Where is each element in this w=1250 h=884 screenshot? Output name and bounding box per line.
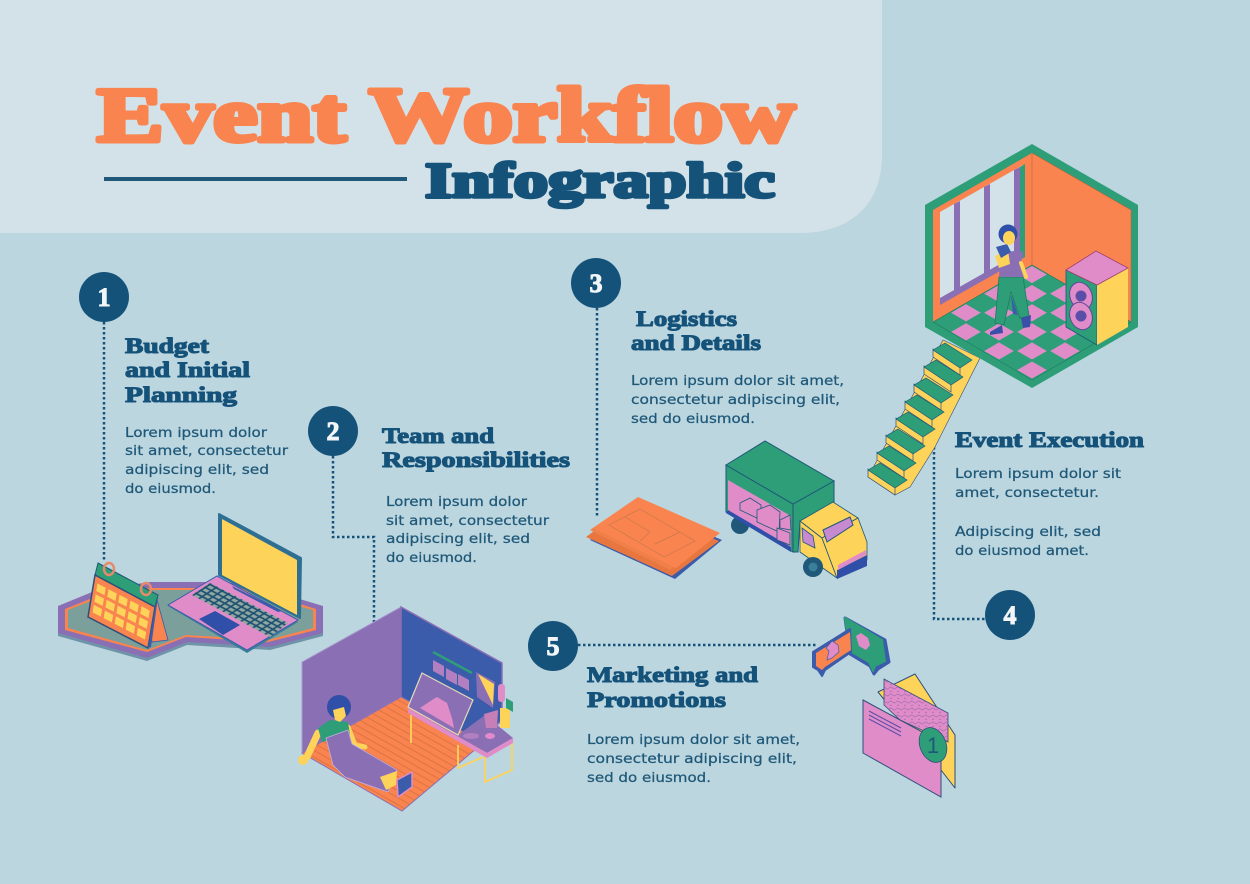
body text 4: do eiusmod amet. <box>955 544 1089 559</box>
body text 4 <box>955 467 1121 559</box>
title: Event Workflow <box>97 72 795 158</box>
heading 5: Marketing and <box>587 662 758 687</box>
number badge 1 <box>79 272 129 322</box>
checker floor <box>933 265 1131 380</box>
illustration: floor plans <box>586 497 722 579</box>
body text 5: Lorem ipsum dolor sit amet, <box>587 733 800 748</box>
speaker <box>1066 251 1128 345</box>
number badge 2: 2 <box>326 417 340 446</box>
heading 5 <box>587 662 758 712</box>
room walls <box>302 607 401 753</box>
orange chat bubble <box>813 629 851 676</box>
connector lines <box>104 308 985 645</box>
illustration: delivery truck <box>726 441 867 579</box>
heading 1: Budget <box>125 333 210 358</box>
illustration: event room with stairs <box>868 144 1138 495</box>
cab <box>800 521 837 578</box>
seated person <box>298 695 412 797</box>
heading 1: Planning <box>125 382 237 407</box>
number badge 4: 4 <box>1004 601 1016 630</box>
laptop <box>168 514 301 653</box>
body text 2: sit amet, consectetur <box>386 514 550 529</box>
number badge 1: 1 <box>98 283 110 312</box>
number badge 4 <box>985 590 1035 640</box>
step 2: team and responsibilities <box>308 406 571 566</box>
floor <box>302 697 483 811</box>
heading 1 <box>125 333 250 407</box>
body text 5: consectetur adipiscing elit, <box>587 752 797 767</box>
body text 1 <box>125 426 289 497</box>
green chat bubble <box>845 618 889 674</box>
header panel <box>0 0 882 233</box>
heading 2 <box>382 423 571 472</box>
heading 3: and Details <box>631 330 762 355</box>
illustration: chat bubbles and envelope <box>813 618 955 797</box>
number badge 2 <box>308 406 358 456</box>
step 4: event execution <box>955 427 1144 640</box>
body text 5: sed do eiusmod. <box>587 771 711 786</box>
cargo boxes <box>740 498 791 545</box>
body text 1: sit amet, consectetur <box>125 444 289 459</box>
body text 2 <box>386 495 550 566</box>
body text 3: sed do eiusmod. <box>631 412 755 427</box>
body text 4: Adipiscing elit, sed <box>955 525 1101 540</box>
body text 1: adipiscing elit, sed <box>125 463 269 478</box>
body text 2: Lorem ipsum dolor <box>386 495 528 510</box>
heading 3: Logistics <box>636 306 738 331</box>
illustration: calendar and laptop on platform <box>58 514 323 661</box>
cargo box <box>726 465 793 552</box>
title rule <box>104 177 407 181</box>
body text 2: do eiusmod. <box>386 551 477 566</box>
subtitle: Infographic <box>425 152 775 208</box>
windows <box>940 164 1025 305</box>
body text 4: Lorem ipsum dolor sit <box>955 467 1121 482</box>
heading 2: Responsibilities <box>382 447 571 472</box>
rear wheel <box>731 516 749 534</box>
heading 1: and Initial <box>125 357 250 382</box>
heading 5: Promotions <box>587 687 727 712</box>
body text 1: do eiusmod. <box>125 482 216 497</box>
body text 3: Lorem ipsum dolor sit amet, <box>631 374 844 389</box>
step 1: budget and initial planning <box>79 272 289 497</box>
title <box>97 72 795 208</box>
number badge 3 <box>571 258 621 308</box>
number badge 3: 3 <box>590 269 602 298</box>
desk <box>408 673 513 782</box>
heading 4: Event Execution <box>955 427 1144 452</box>
stairs <box>868 340 980 495</box>
heading 2: Team and <box>382 423 494 448</box>
calendar <box>88 563 168 648</box>
illustration: home studio room <box>298 607 513 811</box>
body text 5 <box>587 733 800 786</box>
body text 2: adipiscing elit, sed <box>386 532 530 547</box>
envelope <box>863 674 955 797</box>
standing person <box>990 224 1031 335</box>
body text 3 <box>631 374 844 427</box>
body text 1: Lorem ipsum dolor <box>125 426 268 441</box>
hexagonal room <box>925 144 1138 388</box>
step 5: marketing and promotions <box>528 621 800 786</box>
platform <box>58 582 323 661</box>
number badge 5: 5 <box>546 632 560 661</box>
heading 3 <box>631 306 762 355</box>
body text 4: amet, consectetur. <box>955 486 1099 501</box>
number badge 5 <box>528 621 578 671</box>
badge: 1 <box>927 733 939 758</box>
body text 3: consectetur adipiscing elit, <box>631 393 840 408</box>
wall decor <box>433 652 495 708</box>
step 3: logistics and details <box>571 258 844 427</box>
